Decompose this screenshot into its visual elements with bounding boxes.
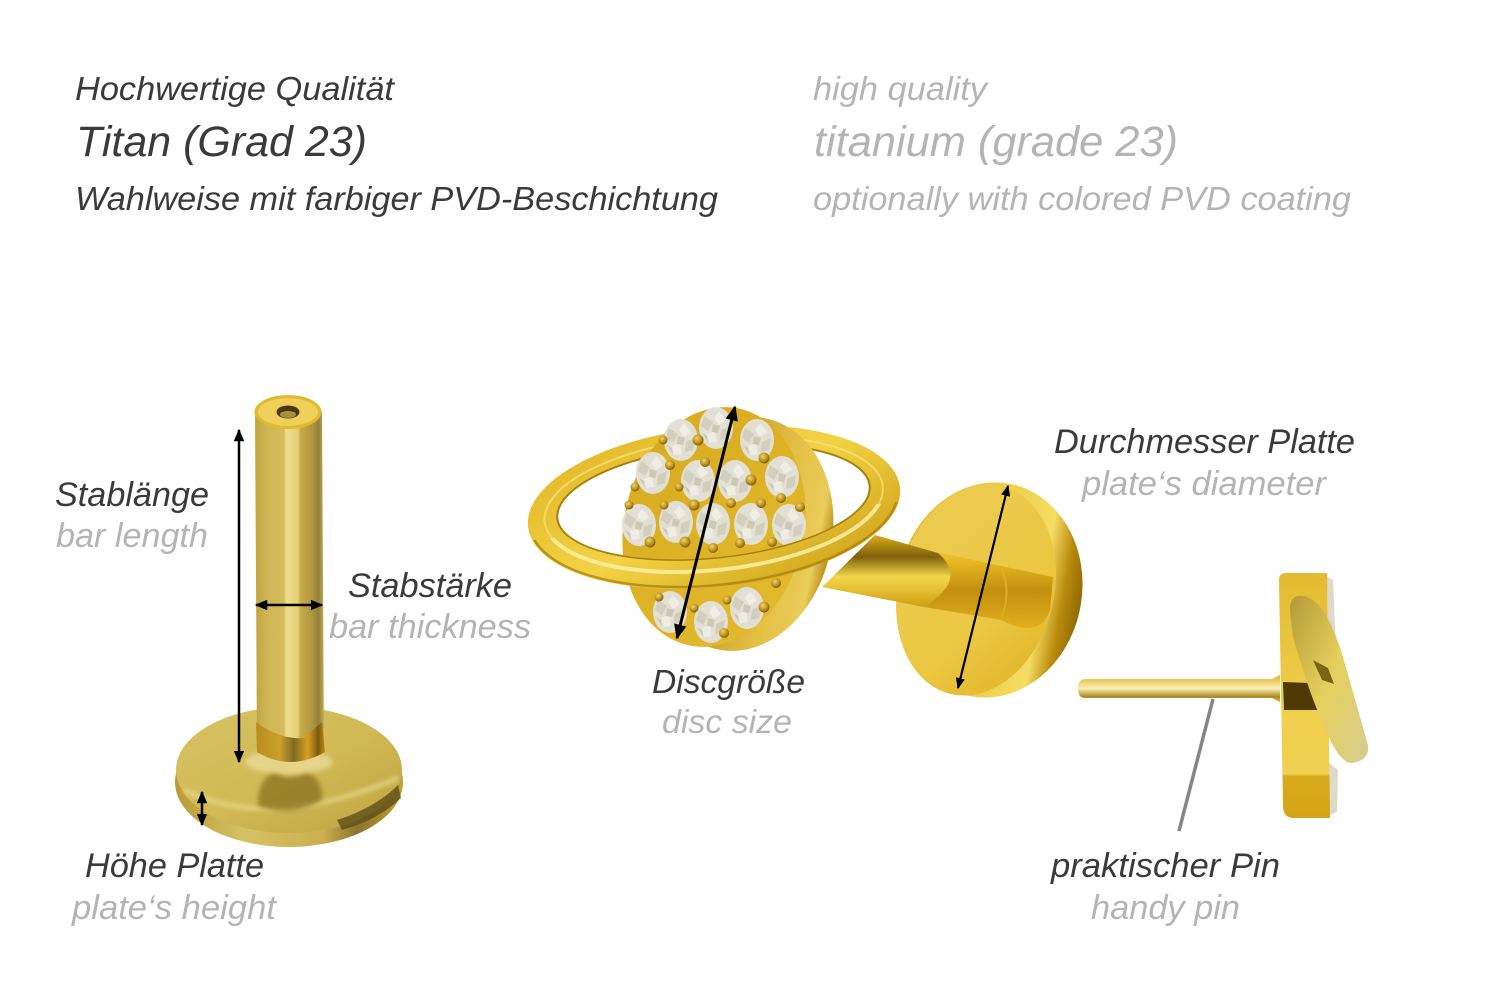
label: bar thickness [329,567,531,646]
label: bar thickness: bar thickness [329,608,531,646]
crystals [622,407,806,643]
label: disc size [652,663,805,740]
pointer line: handy pin [1179,699,1213,831]
stud bar [822,535,950,607]
label: plate height [71,847,278,927]
product: threaded labret bar with base plate [175,395,403,847]
product: planet disc with ring and stud [528,407,1082,698]
heading block: English [813,70,1352,217]
text: PVD coating English: optionally with colored PVD coating [813,180,1352,217]
arrow: plate diameter [958,486,1008,688]
label: bar length: Stablänge [55,476,209,514]
arrow: plate height [201,792,203,825]
disc back rim [629,400,855,668]
label: handy pin: praktischer Pin [1050,847,1280,885]
ring front half [532,502,899,589]
crystal prongs [624,434,805,638]
heading: Titan (Grad 23): Titan (Grad 23) [76,118,367,166]
ring back half [520,408,908,606]
heading: high quality: high quality [813,70,990,107]
bar shaft [254,395,325,762]
label: bar thickness: Stabstärke [348,567,512,605]
label: bar length: bar length [56,517,208,555]
label: plate diameter [1054,423,1355,503]
disc face [601,390,827,664]
arrow: bar length [238,430,240,762]
label: disc size: disc size [662,703,792,740]
base plate [175,707,403,847]
label: plate height: plate‘s height [71,889,278,927]
label: plate diameter: Durchmesser Platte [1054,423,1355,461]
label: handy pin [1050,847,1280,927]
pin [1078,675,1280,702]
label: handy pin: handy pin [1091,889,1240,927]
ring side view [1290,596,1368,763]
arrow: bar thickness [256,604,322,606]
label: plate diameter: plate‘s diameter [1081,465,1328,503]
text: PVD coating German: Wahlweise mit farbiger PVD-Beschichtung [75,180,719,217]
arrow: disc size [677,407,735,638]
disc edge [1279,573,1330,818]
label: disc size: Discgröße [652,663,805,700]
heading block: German [75,70,719,217]
label: plate height: Höhe Platte [85,847,264,885]
label: bar length [55,476,209,555]
heading: titanium (grade 23): titanium (grade 23) [814,118,1178,166]
product: side view with pin [1078,573,1368,818]
stud plate [874,467,1099,713]
heading: Hochwertige Qualität: Hochwertige Qualität [75,70,396,107]
crystals side view [1326,576,1338,816]
